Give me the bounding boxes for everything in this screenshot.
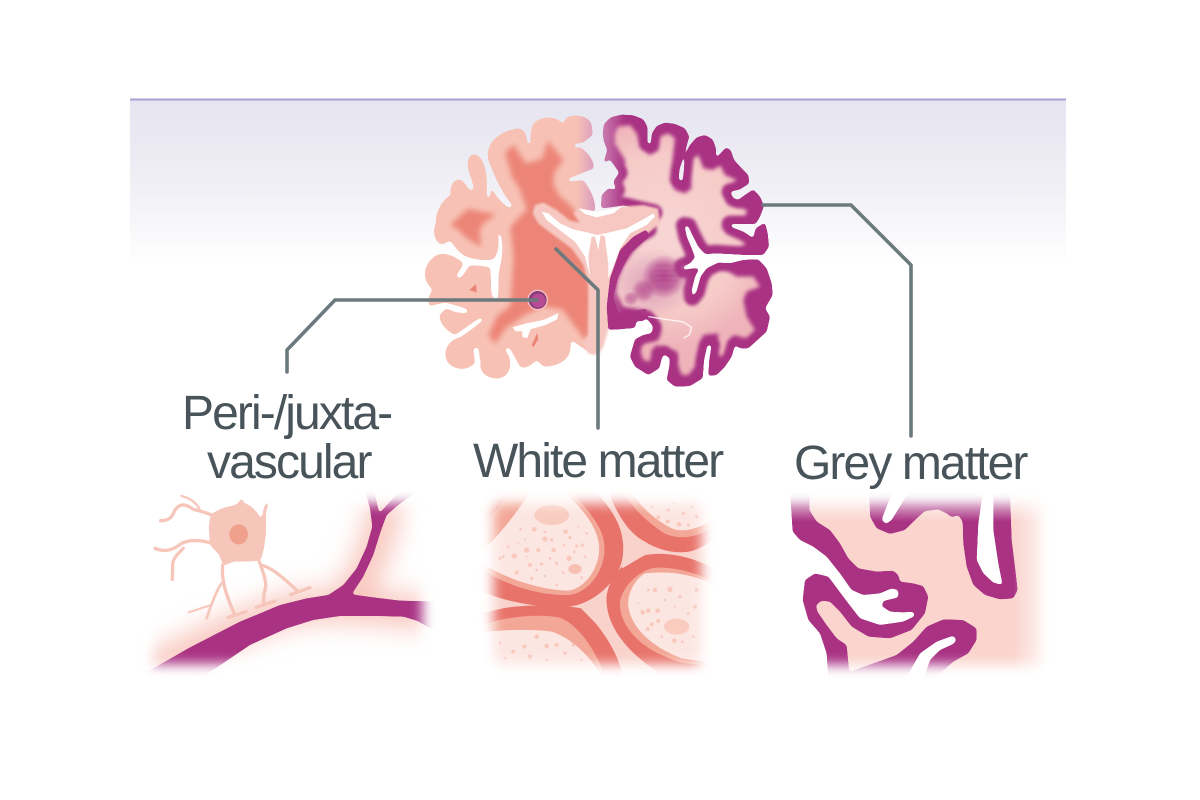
callosum and midline — [533, 203, 660, 355]
ventricle — [542, 212, 655, 278]
label: Grey matter: Grey matter — [794, 437, 1028, 490]
label: Peri-/juxta-vascular: Peri-/juxta- — [182, 387, 391, 440]
right fade — [1015, 504, 1048, 667]
pale tissue — [791, 500, 1043, 670]
insular ribbon — [607, 229, 649, 330]
upper callosal sulcus — [578, 207, 622, 217]
label: Peri-/juxta-vascular: vascular — [207, 436, 372, 489]
panel: white matter cells — [484, 494, 711, 673]
background band — [130, 98, 1066, 265]
vessel glow — [148, 500, 426, 668]
white sulci — [780, 500, 914, 670]
enclosed sulci — [513, 313, 558, 338]
label: White matter: White matter — [473, 435, 724, 488]
connector: white matter — [556, 249, 598, 428]
cell: right — [606, 554, 710, 672]
left hemisphere — [425, 110, 600, 379]
right hemisphere — [601, 115, 773, 387]
brain illustration — [425, 110, 773, 387]
cell: top left — [485, 496, 624, 606]
top fade — [790, 490, 1037, 520]
deep lesion — [612, 248, 695, 318]
pale triangular gaps — [485, 547, 647, 630]
panel: grey matter folds — [790, 496, 1043, 674]
cell: bottom left — [485, 606, 621, 672]
label: Peri-/juxta-vascular — [182, 387, 391, 489]
cell: top right — [610, 496, 710, 552]
vascular lesion — [527, 290, 548, 310]
central structures — [533, 203, 660, 355]
connector: peri-/juxtavascular — [287, 300, 537, 372]
blood vessel — [143, 490, 440, 680]
grey matter ribbons — [790, 490, 1018, 680]
neuron — [155, 496, 310, 618]
panel: perivascular neuron and vessel — [148, 494, 432, 674]
connector: grey matter — [763, 205, 911, 436]
